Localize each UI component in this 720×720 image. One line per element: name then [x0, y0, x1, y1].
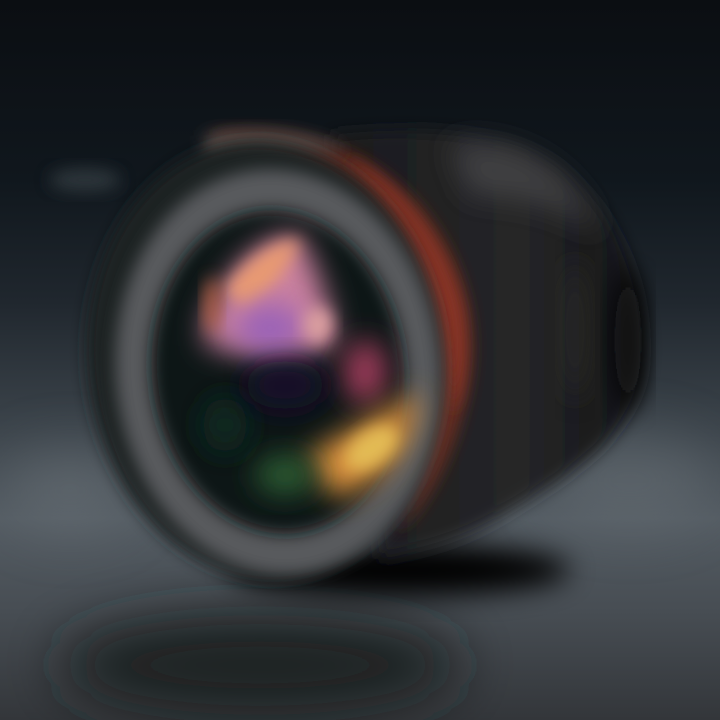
- lens reflections: [203, 235, 418, 498]
- front outer ring: [65, 123, 465, 597]
- lens inner dark: [136, 198, 420, 546]
- red ring: [205, 131, 471, 535]
- front grey ring: [96, 153, 460, 591]
- table reflection: [60, 544, 570, 715]
- lens barrel: [330, 131, 646, 560]
